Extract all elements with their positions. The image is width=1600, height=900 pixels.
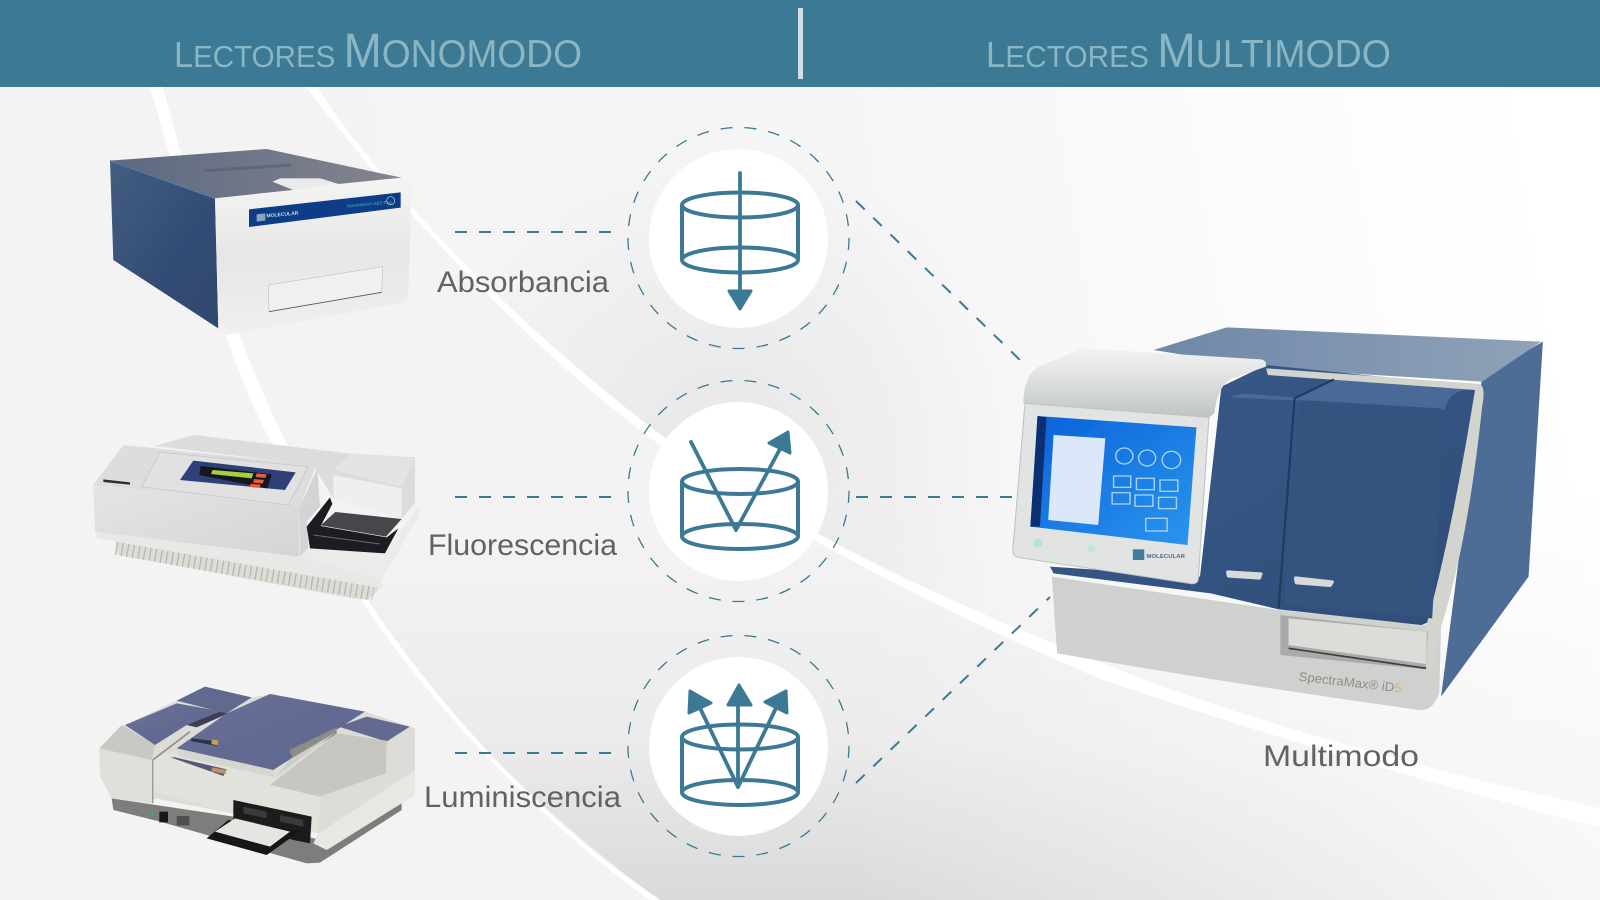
header bar <box>0 0 1600 87</box>
label: Multimodo: Multimodo <box>1263 740 1419 773</box>
label: Fluorescencia: Fluorescencia <box>428 529 617 562</box>
icon: absorbance <box>622 122 855 354</box>
dashed connector: absorbancia to multimodo <box>856 201 1021 361</box>
device: SpectraMax iD5 multimode reader <box>1013 327 1543 710</box>
dashed connector: fluorescencia left <box>455 496 611 498</box>
heading: Lectores Monomodo: LECTORES MONOMODO <box>174 25 582 78</box>
device: SpectraMax iD5 multimode reader: MOLECULAR <box>1146 554 1185 560</box>
label: Absorbancia: Absorbancia <box>437 266 609 299</box>
icon: luminescence <box>622 630 855 862</box>
icon: fluorescence <box>622 375 855 607</box>
device: absorbance reader: SpectraMax® ABS Plus <box>346 199 392 208</box>
label: Luminiscencia: Luminiscencia <box>424 781 621 814</box>
device: luminescence reader <box>99 687 415 863</box>
device: absorbance reader <box>110 149 412 335</box>
device: fluorescence reader <box>93 435 420 600</box>
dashed connector: luminiscencia left <box>455 752 611 754</box>
dashed connector: luminiscencia to multimodo <box>856 597 1050 783</box>
dashed connector: absorbancia left <box>455 231 611 233</box>
dashed connector: fluorescencia to multimodo <box>856 496 1014 498</box>
device: SpectraMax iD5 multimode reader: SpectraMax® iD5 <box>1298 669 1403 695</box>
heading: Lectores Multimodo: LECTORES MULTIMODO <box>986 25 1391 78</box>
device: absorbance reader: MOLECULAR <box>266 211 299 219</box>
